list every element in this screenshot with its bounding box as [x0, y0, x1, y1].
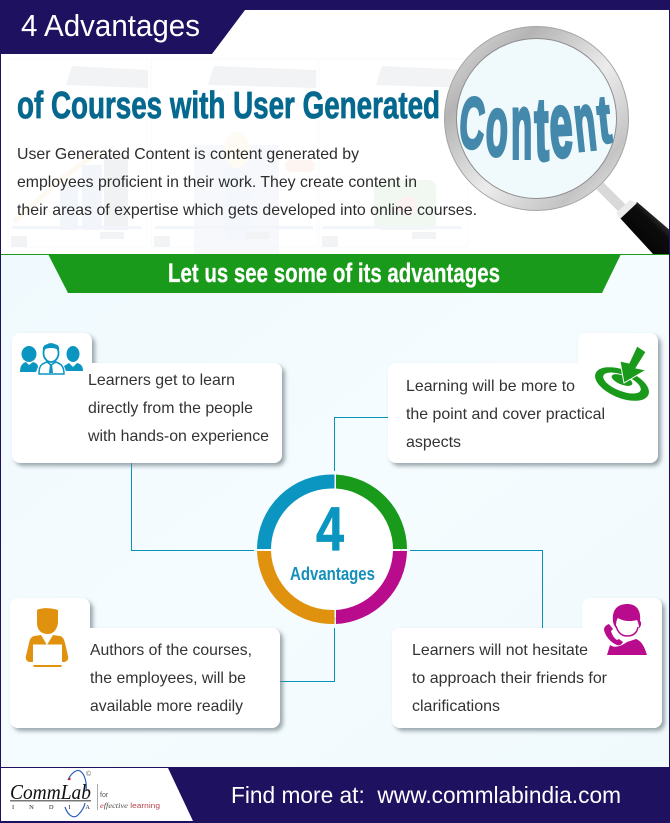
magnified word: n	[511, 75, 532, 178]
icon: magnifying glass	[444, 26, 670, 254]
card text	[412, 642, 608, 715]
card text: Learning will be more to	[406, 378, 575, 395]
footer link: Find more at: www.commlabindia.com	[231, 782, 621, 808]
card text	[87, 372, 269, 445]
panel: learning to the point	[388, 333, 658, 463]
intro text: employees proficient in their work. They create content in	[17, 174, 417, 191]
ring label: Advantages	[290, 564, 375, 584]
title: of Courses with User Generated	[17, 85, 440, 127]
icon: target with arrow	[590, 346, 654, 408]
magnified word: n	[569, 76, 600, 169]
logo: ©	[86, 770, 92, 778]
banner: Let us see some of its advantages	[168, 258, 500, 288]
logo: for	[100, 792, 109, 799]
icon: person on phone	[604, 604, 647, 655]
card text: the point and cover practical	[406, 406, 605, 423]
top header band	[0, 0, 670, 54]
logo: I N D I A	[12, 804, 90, 811]
card text: Learners get to learn	[88, 372, 235, 389]
logo	[10, 770, 160, 817]
card text	[406, 378, 605, 451]
ring number: 4	[316, 495, 344, 564]
faded course screenshots	[7, 58, 468, 260]
magnified word: C	[457, 83, 488, 165]
card text	[90, 642, 252, 715]
green divider line	[0, 254, 670, 255]
magnified word	[457, 73, 614, 179]
card text: aspects	[406, 434, 461, 451]
card text: with hands-on experience	[87, 428, 269, 445]
intro text: their areas of expertise which gets developed into online courses.	[17, 202, 477, 219]
card text: directly from the people	[88, 400, 253, 417]
magnified word: o	[484, 78, 510, 174]
magnified word: t	[534, 79, 550, 179]
panel: learners learn from experts	[12, 333, 282, 463]
panel: authors available	[10, 598, 280, 728]
banner	[48, 254, 621, 293]
icon: author at laptop	[26, 608, 68, 667]
magnified word: e	[547, 73, 575, 178]
connector lines	[132, 418, 542, 682]
footer	[0, 767, 670, 823]
logo: effective learning	[100, 801, 160, 810]
card text: available more readily	[90, 698, 243, 715]
magnified word: t	[594, 81, 614, 158]
intro text: User Generated Content is content generated by	[17, 146, 359, 163]
logo: CommLab	[10, 780, 91, 804]
card text: Learners will not hesitate	[412, 642, 588, 659]
card text: clarifications	[412, 698, 500, 715]
card text: the employees, will be	[90, 670, 246, 687]
card text: to approach their friends for	[412, 670, 608, 687]
card text: Authors of the courses,	[90, 642, 252, 659]
icon: people	[20, 344, 83, 374]
panel: approach friends	[392, 598, 662, 728]
center ring	[257, 474, 407, 624]
intro text	[17, 146, 477, 219]
header label: 4 Advantages	[21, 8, 200, 43]
